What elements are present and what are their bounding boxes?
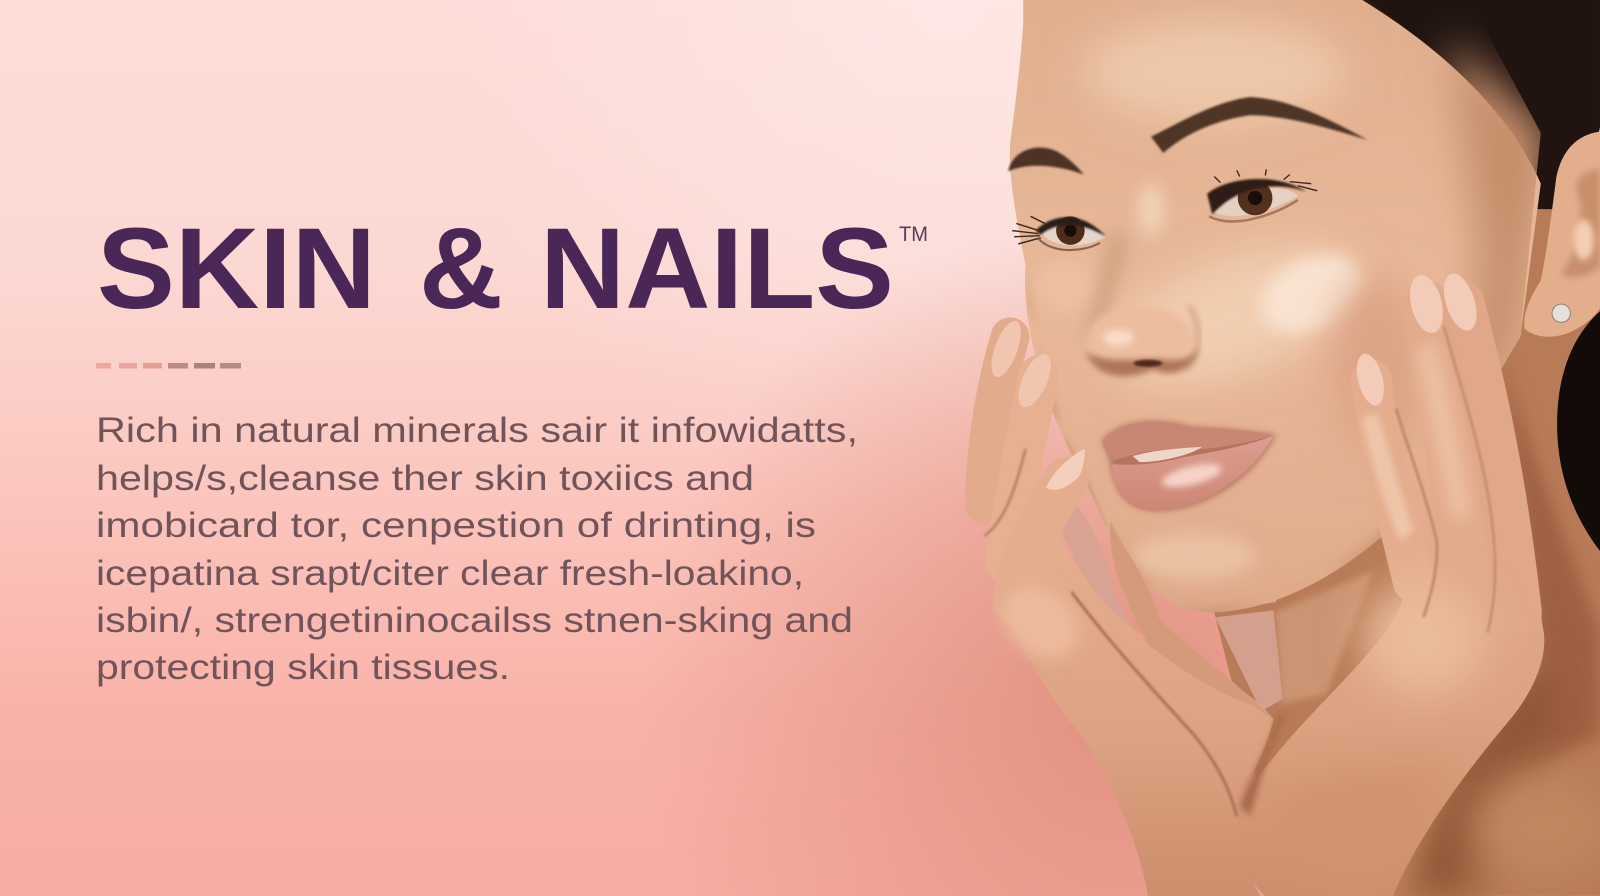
ear inner shadow xyxy=(1561,168,1600,277)
inner finger behind chin xyxy=(1110,520,1273,719)
left lower lash xyxy=(1039,239,1100,250)
nostril xyxy=(1134,360,1162,367)
cheek blush xyxy=(1332,276,1423,459)
trademark: TM xyxy=(899,223,928,246)
nail 1 xyxy=(985,317,1027,381)
earring xyxy=(1552,304,1570,322)
body text: helps/s,cleanse ther skin toxiics and xyxy=(96,458,754,498)
palm crease xyxy=(1071,592,1237,816)
photo: woman touching face xyxy=(985,0,1600,896)
left upper lid xyxy=(1036,217,1106,237)
lips xyxy=(1102,421,1276,511)
chest shadow beside hand xyxy=(1398,653,1561,896)
chest light xyxy=(1469,770,1600,883)
lip gloss xyxy=(1160,459,1224,492)
title: SKIN xyxy=(97,205,376,333)
hair main xyxy=(1362,0,1600,209)
forehead light xyxy=(1082,20,1347,122)
palm xyxy=(1236,449,1544,896)
neck light area xyxy=(1276,571,1372,704)
left lashes xyxy=(1012,216,1045,244)
body text xyxy=(96,410,858,687)
nail A xyxy=(1405,272,1449,336)
right lower lid xyxy=(1209,200,1298,221)
nose underside xyxy=(1086,347,1199,376)
lower lip xyxy=(1112,436,1273,510)
teeth xyxy=(1133,447,1202,462)
chin light xyxy=(1133,534,1255,579)
nose bridge light xyxy=(1139,183,1163,236)
nail B xyxy=(1437,269,1483,335)
cheek shine xyxy=(1257,248,1366,338)
finger light xyxy=(1418,342,1469,520)
left iris xyxy=(1056,216,1085,245)
right nose wing contour xyxy=(1186,306,1198,369)
right eye xyxy=(1207,169,1317,221)
right eye white xyxy=(1214,188,1298,216)
left pupil xyxy=(1064,224,1077,237)
left eyebrow xyxy=(1008,147,1084,174)
hand join shadow xyxy=(1240,709,1288,816)
hair left xyxy=(1023,0,1051,22)
title: & xyxy=(419,205,503,333)
left eye white xyxy=(1041,219,1106,245)
palm shadow xyxy=(1283,760,1449,896)
middle finger xyxy=(1429,306,1461,531)
finger one xyxy=(985,337,1010,505)
nose shine xyxy=(1103,330,1134,346)
body text: protecting skin tissues. xyxy=(96,647,510,687)
cheek highlight xyxy=(1126,239,1330,394)
ear xyxy=(1524,132,1600,337)
finger light 2 xyxy=(1362,413,1413,541)
nose tip xyxy=(1088,306,1194,371)
left hand xyxy=(985,317,1273,896)
jaw shadow xyxy=(1134,530,1382,612)
neck and shoulder xyxy=(1214,184,1600,896)
side nose shade xyxy=(1086,232,1128,329)
nail 3 xyxy=(1046,449,1085,490)
face shading xyxy=(1010,20,1551,628)
hair behind neck xyxy=(1557,311,1600,551)
nail C xyxy=(1352,351,1389,408)
body text: imobicard tor, cenpestion of drinting, is xyxy=(96,505,816,545)
dashed divider xyxy=(96,363,241,368)
ear highlight xyxy=(1573,219,1594,260)
back of hand light xyxy=(1362,582,1485,694)
mouth shadow xyxy=(1102,421,1276,511)
nail 2 xyxy=(1012,350,1057,412)
right eyebrow xyxy=(1151,97,1367,153)
right upper lid xyxy=(1207,179,1306,214)
left edge shade xyxy=(1030,296,1106,526)
index finger xyxy=(1371,380,1413,582)
wrist and palm xyxy=(999,510,1273,896)
right hand xyxy=(1236,269,1544,896)
nose xyxy=(1086,306,1199,376)
background gap under jaw xyxy=(1215,610,1283,711)
ear shape xyxy=(1524,132,1600,337)
finger three xyxy=(1015,480,1066,602)
finger crease xyxy=(985,449,1026,536)
left eye xyxy=(1012,216,1106,250)
ring finger xyxy=(1461,304,1518,612)
title xyxy=(97,205,894,333)
finger separation xyxy=(1396,408,1437,617)
hair wisp on forehead xyxy=(1337,0,1505,173)
right pupil xyxy=(1248,191,1262,205)
finger separation 2 xyxy=(1444,327,1495,633)
right iris xyxy=(1238,181,1272,215)
finger two xyxy=(1005,376,1039,561)
right lashes xyxy=(1214,169,1317,191)
right face shadow xyxy=(1429,28,1541,368)
background gap by left hand xyxy=(1061,490,1153,653)
neck shadow xyxy=(1480,347,1600,796)
upper lip xyxy=(1102,422,1273,460)
hand light xyxy=(990,573,1092,672)
body text: icepatina srapt/citer clear fresh-loakino, xyxy=(96,553,804,593)
title: NAILS xyxy=(540,205,894,333)
body text: isbin/, strengetininocailss stnen-sking and xyxy=(96,600,853,640)
under eye shade xyxy=(1054,270,1084,296)
face xyxy=(1010,0,1541,612)
body text: Rich in natural minerals sair it infowidatts, xyxy=(96,410,858,450)
hair xyxy=(1023,0,1600,551)
